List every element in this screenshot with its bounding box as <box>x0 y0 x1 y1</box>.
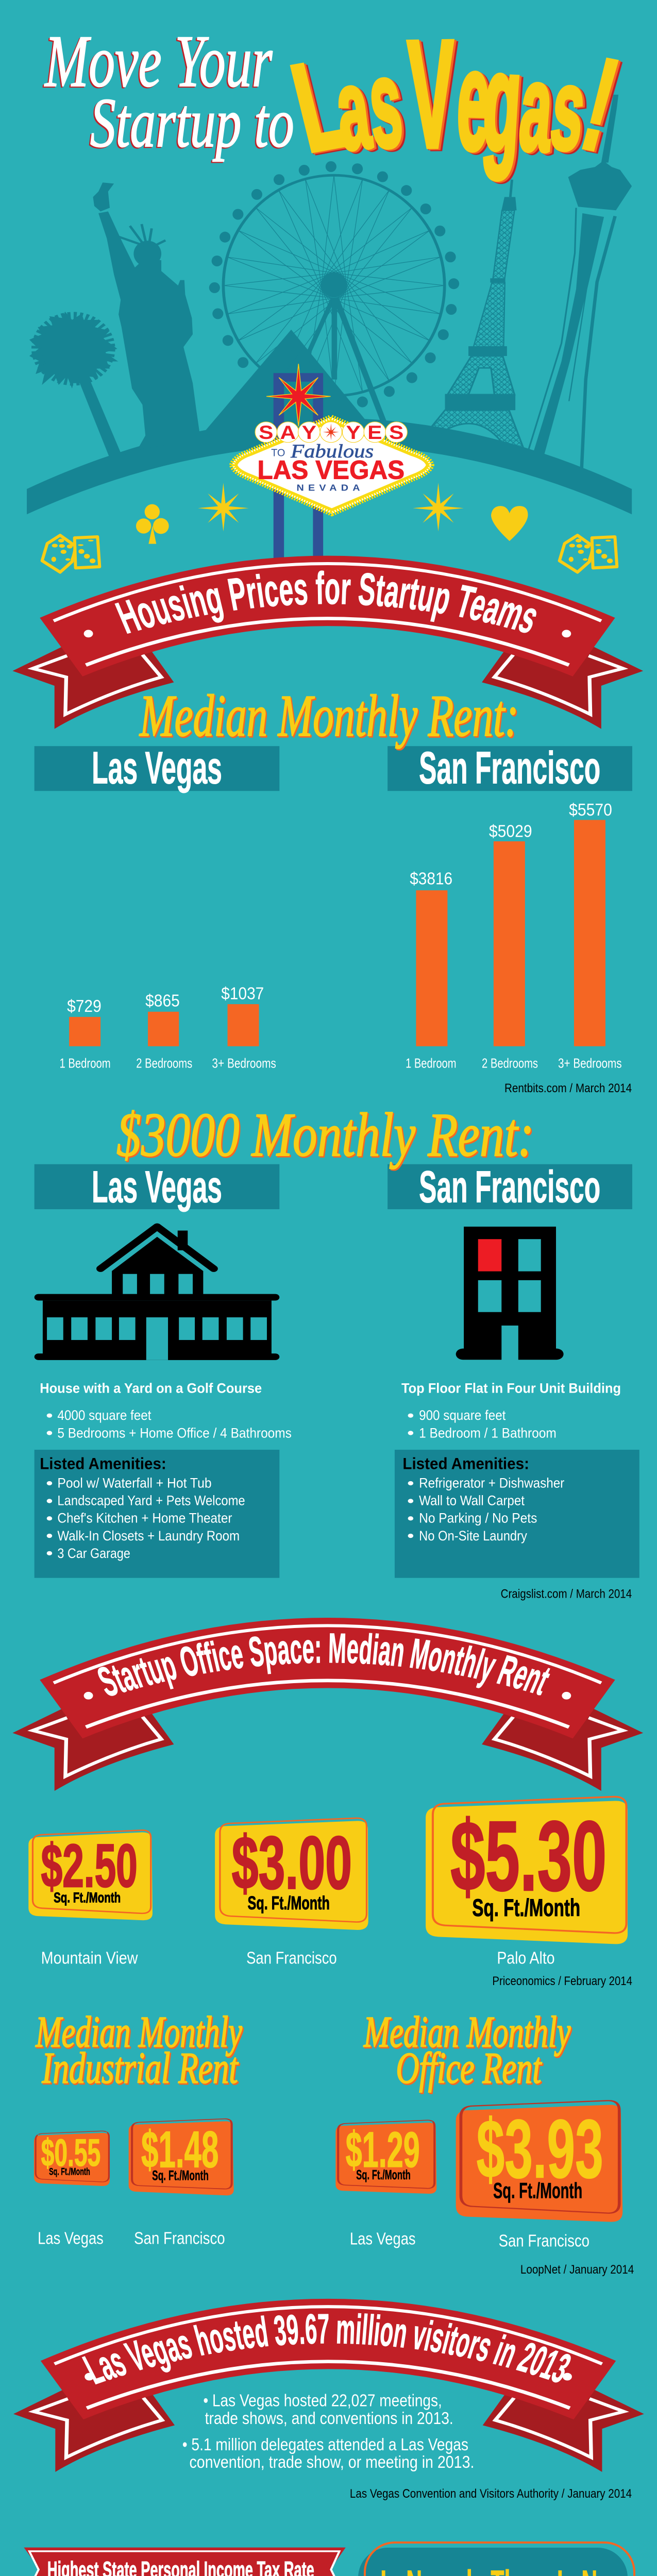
city labels for industrial and office tags: San Francisco <box>134 2228 225 2248</box>
icon: dice right <box>560 535 617 572</box>
orange price tags: Sq. Ft./Month <box>49 2166 90 2177</box>
panel: las vegas amenities: Landscaped Yard + Pets Welcome <box>57 1493 245 1509</box>
orange price tags: Sq. Ft./Month <box>152 2168 209 2183</box>
price tag: office san francisco <box>456 2100 622 2222</box>
title: Las Vegas!: a <box>515 39 558 177</box>
nevada: NEVADA <box>296 483 360 493</box>
pyramid <box>200 330 379 436</box>
sign star <box>266 364 331 426</box>
price tag: office las vegas <box>335 2120 436 2194</box>
banner: startup office space <box>12 1618 643 1791</box>
bar chart: San Francisco: 1 Bedroom <box>406 1056 456 1071</box>
icon: house <box>35 1227 279 1360</box>
orange price tags: Sq. Ft./Month <box>356 2167 411 2182</box>
orange price tags: $0.55 <box>41 2131 100 2174</box>
san francisco listing: 900 square feet <box>419 1407 506 1423</box>
panel: san francisco amenities <box>395 1450 639 1578</box>
bar chart: Las Vegas: $729 <box>67 996 102 1015</box>
title: Las Vegas! <box>280 9 631 181</box>
visitor stats <box>182 2391 474 2471</box>
welcome sign: small <box>232 364 431 605</box>
eiffel tower <box>427 180 525 451</box>
icon: dice left <box>42 535 99 572</box>
visitor stats: • 5.1 million delegates attended a Las Vegas <box>182 2434 468 2454</box>
price tag: mountain view <box>28 1830 153 1920</box>
price tag: mountain view: Sq. Ft./Month <box>54 1889 121 1906</box>
bar chart: San Francisco: 2 Bedrooms <box>482 1056 538 1071</box>
banner: startup office space: Startup Office Space: Median Monthly Rent <box>98 1633 550 1696</box>
icon: heart <box>491 506 528 541</box>
fabulous: Fabulous <box>290 440 374 462</box>
header: Las Vegas: Las Vegas <box>92 1162 222 1212</box>
heading: median monthly office rent: Office Rent <box>396 2043 542 2092</box>
bar chart: Las Vegas <box>59 984 276 1071</box>
title: Las Vegas!: e <box>454 21 493 180</box>
stratosphere tower <box>528 95 632 470</box>
title: Las Vegas!: s <box>364 33 407 174</box>
bar chart: San Francisco <box>406 800 622 1071</box>
housing section <box>12 555 643 1095</box>
header: Las Vegas: Las Vegas <box>92 742 222 793</box>
bar chart: Las Vegas: $1037 <box>221 984 264 1003</box>
bar chart: San Francisco: $5029 <box>489 821 532 840</box>
banner: visitors <box>13 2299 644 2472</box>
ribbon: highest state personal income tax <box>24 2548 346 2576</box>
panel: san francisco amenities: Refrigerator + Dishwasher <box>419 1475 564 1490</box>
heading: median monthly industrial rent: Industrial Rent <box>42 2043 239 2092</box>
banner: housing prices <box>12 555 643 729</box>
price tag: san francisco: Sq. Ft./Month <box>248 1892 330 1913</box>
panel: las vegas amenities: Walk-In Closets + Laundry Room <box>57 1528 240 1544</box>
title: Las Vegas!: ! <box>570 32 631 178</box>
bar chart: San Francisco: $5570 <box>569 800 612 819</box>
say yes bulbs <box>255 422 407 443</box>
orange price tags: $1.48 <box>141 2121 218 2178</box>
icon: yellow star right <box>413 483 464 531</box>
las vegas listing: House with a Yard on a Golf Course <box>40 1380 262 1396</box>
price tag: industrial san francisco <box>129 2119 234 2195</box>
header: Las Vegas <box>35 742 279 793</box>
title: Move Your Startup to: Move Your <box>44 20 273 102</box>
statue of liberty <box>93 182 200 456</box>
panel: in nevada there is no (background) <box>358 2543 634 2576</box>
banner: visitors: Las Vegas hosted 39.67 million visitors in 2013 <box>81 2313 571 2384</box>
las vegas listing <box>40 1380 292 1440</box>
city labels for industrial and office tags <box>38 2228 589 2250</box>
title: Move Your Startup to: Startup to <box>90 84 294 162</box>
bar chart: Las Vegas: 2 Bedrooms <box>136 1056 192 1071</box>
las vegas: LAS VEGAS <box>258 455 405 485</box>
city labels: Palo Alto <box>497 1948 555 1968</box>
posts <box>274 373 323 605</box>
bar chart: Las Vegas: $865 <box>145 991 180 1010</box>
city labels: San Francisco <box>246 1948 337 1968</box>
panel: san francisco amenities: Listed Amenities: <box>402 1454 529 1473</box>
say yes text: SAY YES <box>259 422 403 443</box>
city labels for industrial and office tags: Las Vegas <box>350 2229 416 2248</box>
title: Las Vegas!: V <box>407 9 456 179</box>
panel: las vegas amenities: Listed Amenities: <box>40 1454 166 1473</box>
city labels: Mountain View <box>41 1948 138 1968</box>
heading: median monthly office rent <box>363 2007 571 2092</box>
title: Las Vegas!: s <box>545 44 592 175</box>
ground arc <box>27 418 632 514</box>
panel: san francisco amenities: Wall to Wall Carpet <box>419 1493 525 1509</box>
panel: las vegas amenities: Chef's Kitchen + Home Theater <box>57 1510 232 1526</box>
city labels for industrial and office tags: San Francisco <box>499 2231 589 2250</box>
panel: san francisco amenities: No On-Site Laundry <box>419 1528 527 1544</box>
bar chart: San Francisco: $3816 <box>410 869 452 888</box>
icon: club <box>136 504 169 544</box>
hero section <box>27 9 632 605</box>
bar chart: Las Vegas: 3+ Bedrooms <box>212 1056 276 1071</box>
price tag: mountain view: $2.50 <box>41 1832 138 1900</box>
title: Las Vegas!: L <box>280 33 361 178</box>
icon: flat building <box>456 1227 564 1360</box>
visitor stats: trade shows, and conventions in 2013. <box>205 2408 453 2428</box>
to: TO <box>271 447 285 459</box>
office space section <box>12 1618 643 2094</box>
orange price tags: $1.29 <box>346 2122 420 2178</box>
price tag: san francisco: $3.00 <box>232 1821 352 1905</box>
header: Las Vegas <box>35 1162 279 1212</box>
title: Las Vegas!: a <box>329 45 377 174</box>
banner: housing prices: Housing Prices for Startup Teams <box>114 570 536 634</box>
monthly rent comparison section <box>35 1100 639 1601</box>
heading: median monthly industrial rent <box>35 2007 242 2092</box>
city labels for industrial and office tags: Las Vegas <box>38 2228 104 2248</box>
visitors and tax section <box>13 2228 644 2576</box>
panel: san francisco amenities: No Parking / No Pets <box>419 1510 537 1526</box>
panel: las vegas amenities: Pool w/ Waterfall + Hot Tub <box>57 1475 212 1490</box>
bar chart: Las Vegas: 1 Bedroom <box>59 1056 111 1071</box>
icon: yellow star left <box>198 483 249 531</box>
panel: las vegas amenities: 3 Car Garage <box>57 1545 130 1561</box>
heading: median monthly industrial rent: Median Monthly <box>35 2007 242 2056</box>
las vegas listing: 5 Bedrooms + Home Office / 4 Bathrooms <box>57 1425 292 1440</box>
las vegas listing: 4000 square feet <box>57 1407 151 1423</box>
title: Move Your Startup to <box>44 20 294 162</box>
sign board <box>232 417 431 514</box>
visitor stats: convention, trade show, or meeting in 2013. <box>190 2452 474 2471</box>
panel: las vegas amenities <box>35 1450 279 1578</box>
san francisco listing: 1 Bedroom / 1 Bathroom <box>419 1425 557 1440</box>
price tag: palo alto: Sq. Ft./Month <box>472 1895 580 1922</box>
price tag: industrial las vegas <box>34 2131 110 2186</box>
palm tree <box>29 312 122 459</box>
visitor stats: • Las Vegas hosted 22,027 meetings, <box>203 2391 442 2410</box>
orange price tags <box>34 2100 622 2222</box>
price tag: san francisco <box>215 1818 368 1930</box>
skyline silhouette <box>27 95 632 514</box>
san francisco listing <box>401 1380 621 1440</box>
price tag: palo alto <box>426 1797 628 1944</box>
ferris wheel <box>209 161 459 427</box>
bar chart: San Francisco: 3+ Bedrooms <box>558 1056 622 1071</box>
city labels <box>41 1948 555 1968</box>
title: Las Vegas!: g <box>479 24 526 181</box>
